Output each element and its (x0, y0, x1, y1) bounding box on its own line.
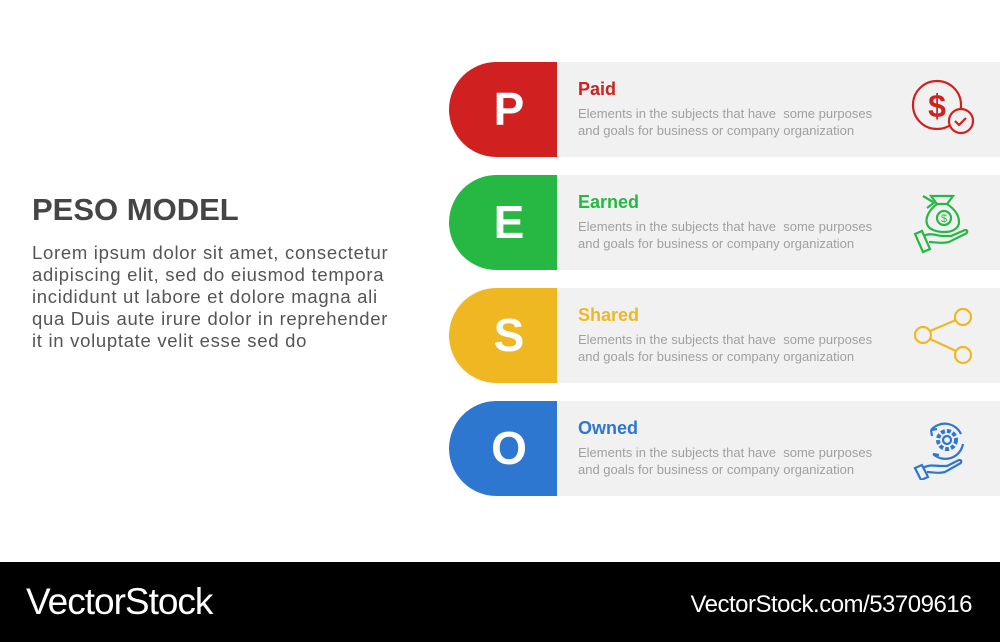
text shared: Elements in the subjects that have some purposes (578, 332, 872, 347)
text shared (578, 332, 872, 364)
description text: incididunt ut labore et dolore magna ali (32, 286, 378, 307)
icon: money bag hand: $ (941, 213, 947, 225)
pill O: O (491, 422, 527, 474)
text paid: and goals for business or company organization (578, 122, 854, 138)
pill P (449, 62, 557, 157)
pill S: S (494, 309, 524, 361)
row: owned (449, 401, 1000, 496)
description text: adipiscing elit, sed do eiusmod tempora (32, 264, 384, 285)
text earned (578, 219, 872, 250)
icon: gear hand (914, 422, 964, 480)
row: shared (449, 288, 1000, 383)
icon: money bag hand (914, 194, 968, 254)
description text (32, 242, 388, 351)
pill E: E (494, 196, 524, 248)
description text: qua Duis aute irure dolor in reprehender (32, 308, 388, 329)
heading owned: Owned (578, 418, 638, 438)
text shared: and goals for business or company organization (578, 348, 854, 364)
icon: dollar check (912, 80, 974, 134)
footer url: VectorStock.com/53709616 (690, 591, 972, 618)
title: PESO MODEL (32, 192, 239, 227)
pill O (449, 401, 557, 496)
description text: Lorem ipsum dolor sit amet, consectetur (32, 242, 388, 263)
footer logo: VectorStock (26, 581, 212, 622)
icon: share (914, 308, 972, 364)
footer (0, 562, 1000, 642)
text owned: Elements in the subjects that have some purposes (578, 445, 872, 460)
description text: it in voluptate velit esse sed do (32, 330, 307, 351)
text earned: and goals for business or company organization (578, 236, 854, 250)
pill E (449, 175, 557, 270)
heading shared: Shared (578, 305, 639, 325)
row: earned (449, 175, 1000, 270)
text owned (578, 445, 872, 476)
text owned: and goals for business or company organization (578, 462, 854, 476)
pill P: P (494, 83, 524, 135)
pill S (449, 288, 557, 383)
heading paid: Paid (578, 79, 616, 99)
icon: dollar check: $ (928, 88, 946, 124)
text earned: Elements in the subjects that have some purposes (578, 219, 872, 234)
row: paid (449, 62, 1000, 157)
heading earned: Earned (578, 192, 639, 212)
text paid: Elements in the subjects that have some purposes (578, 106, 872, 121)
text paid (578, 106, 872, 138)
